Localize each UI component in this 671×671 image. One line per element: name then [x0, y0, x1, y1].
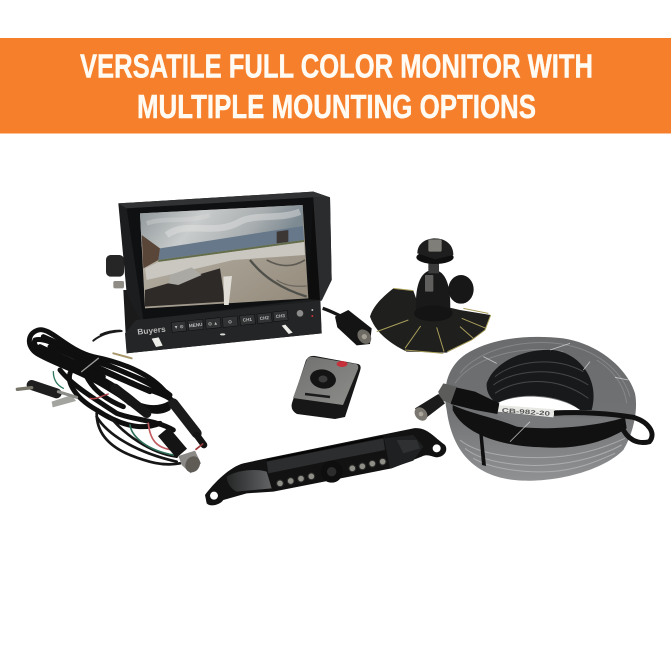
neck: [428, 262, 439, 273]
cable loop: [554, 413, 652, 443]
mounting holes: [210, 492, 218, 500]
knob: [448, 275, 474, 304]
brand logo: Buyers: [137, 325, 167, 337]
bracket slots: [152, 337, 163, 347]
harness round connector: [163, 432, 203, 475]
front black band: [453, 405, 627, 448]
bracket: [123, 290, 322, 353]
wiring harness cables: [29, 330, 204, 464]
base: [370, 288, 491, 353]
road: [145, 242, 305, 280]
inner dark wall: [487, 350, 594, 410]
mount knob: [106, 255, 124, 288]
button row: CH3: [275, 313, 286, 319]
trailer corner: [142, 235, 160, 268]
monitor plug: [335, 310, 374, 347]
label: [497, 405, 555, 417]
lower ribs: [460, 438, 625, 472]
license plate bar camera: [205, 428, 446, 505]
button row: ⊙: [228, 319, 232, 325]
title: MULTIPLE MOUNTING OPTIONS: [137, 88, 536, 125]
rear cable: [323, 308, 342, 317]
cable wraps: [483, 343, 628, 442]
power button: [297, 310, 303, 317]
orange title banner: [0, 38, 671, 134]
remote control: [292, 356, 361, 419]
top plate: [416, 251, 454, 264]
black tape: [479, 434, 486, 466]
monitor bezel: [127, 197, 313, 320]
hitch: [145, 268, 225, 307]
coil connector: [412, 383, 499, 423]
button row: MENU: [189, 322, 203, 328]
button row: CH1: [242, 317, 253, 323]
lens: [321, 461, 343, 483]
building: [158, 226, 304, 260]
screen: [140, 205, 308, 308]
extension cable coil: CB-982-20: [502, 407, 551, 418]
button row: CH2: [259, 315, 270, 321]
top ribs: [455, 343, 630, 403]
front panel: [125, 301, 322, 353]
LEDs: [277, 458, 386, 487]
button row: ▼ ⊙: [174, 324, 184, 330]
ball: [416, 270, 450, 315]
center hole: [497, 397, 580, 410]
cable stub: [100, 331, 121, 335]
monitor: [100, 192, 374, 353]
hood: [118, 192, 332, 320]
suction mount: [370, 238, 491, 353]
button row: ⊙ ▲: [208, 320, 218, 326]
extension cable coil: [445, 337, 652, 481]
title: [80, 48, 593, 125]
button row: [171, 311, 288, 332]
harness RCA plug: [17, 385, 77, 407]
